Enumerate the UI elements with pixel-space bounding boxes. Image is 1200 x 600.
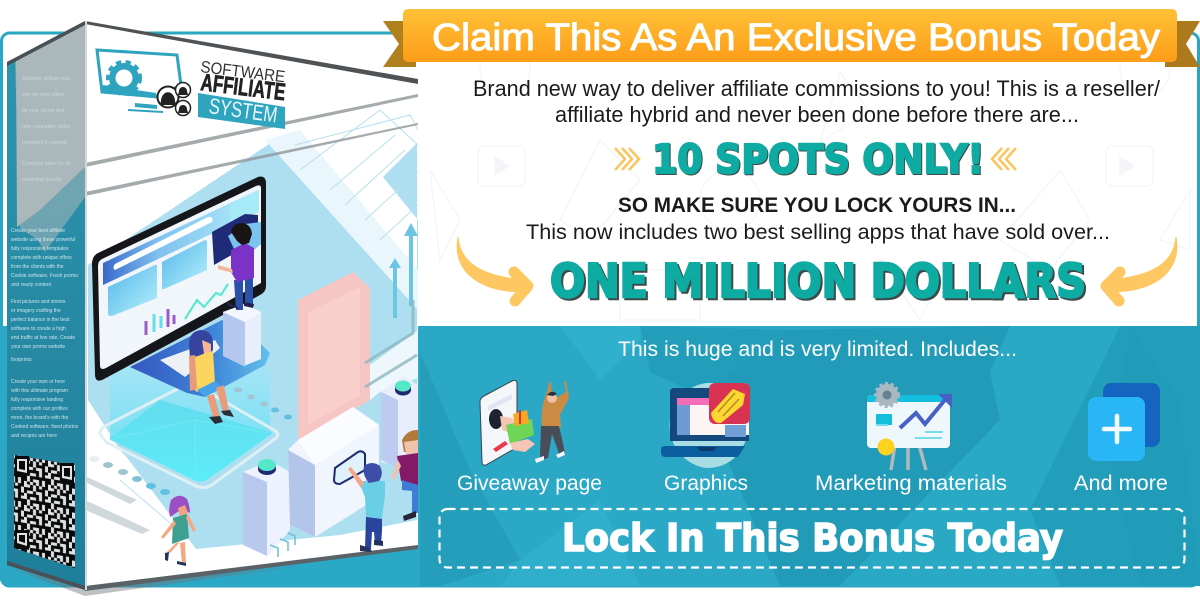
heading: one million dollars: ONE MILLION DOLLARS: [550, 254, 1086, 308]
box: side text: your own promo website: [11, 344, 65, 350]
art: monitor: [92, 177, 266, 381]
box: side text: complete with unique offers: [11, 255, 72, 261]
label: giveaway page: Giveaway page: [457, 471, 602, 495]
box: QR code: [14, 455, 75, 568]
ribbon: main banner: [403, 9, 1177, 62]
button: lock in bonus: [440, 509, 1184, 568]
art: left pillar: [243, 459, 295, 557]
person: man at monitor: [218, 223, 254, 310]
logo: affiliate: AFFILIATE: [199, 69, 287, 106]
box: side text faint: new campaigns today: [22, 124, 71, 130]
box: side text: Cooked software, fixed photos: [11, 424, 79, 430]
ribbon: left tail: [383, 21, 416, 67]
box: side text: software to create a high: [11, 326, 66, 332]
box: side text: or imagery crafting the: [11, 308, 61, 314]
art: pillar under man: [223, 304, 261, 366]
text block: intro: [473, 76, 1161, 127]
box: side text faint: marketing funnels: [22, 177, 62, 183]
ribbon: right tail: [1165, 21, 1200, 67]
art: upward arrows: [389, 223, 418, 318]
box: side text: Find pictures and stories: [11, 299, 66, 305]
box: side text faint: [22, 76, 71, 183]
box: side text: more, the brand's with the: [11, 415, 69, 421]
label: graphics: Graphics: [664, 471, 748, 495]
panel: lower teal section facets: [420, 326, 1200, 586]
box: side text: Cookie software. Fresh promo: [11, 273, 78, 279]
art: floor shadows: [85, 476, 150, 534]
logo: software: SOFTWARE: [200, 58, 286, 86]
box: side text: with this ultimate program: [11, 388, 68, 394]
box: side text: fully responsive templates: [11, 246, 69, 252]
icon: giveaway page: [480, 380, 569, 465]
box: left edge highlight: [85, 21, 87, 590]
person: child: [161, 496, 196, 566]
title: Claim This As An Exclusive Bonus Today: [432, 17, 1160, 59]
label: marketing materials: Marketing materials: [815, 471, 1007, 495]
box: side text: Create your best affiliate: [11, 228, 65, 234]
heading: 10 spots only: 10 SPOTS ONLY!: [652, 137, 984, 183]
box: side text: perfect balance in the best: [11, 317, 70, 323]
arrow: right: [1106, 237, 1177, 301]
person: boy at right: [391, 430, 418, 521]
arrow: left: [457, 237, 528, 301]
text block: includes: This is huge and is very limited. Includes...: [618, 338, 1017, 361]
icon: graphics: [661, 383, 750, 468]
box: side panel: [7, 21, 85, 590]
person: seated woman: [189, 330, 234, 424]
art: central white block: [288, 407, 379, 537]
text block: intro: affiliate hybrid and never been done before there are...: [555, 102, 1079, 127]
art: pink panel: [298, 272, 370, 442]
box: side text: Create your own or here: [11, 379, 65, 385]
box: side text: complete with our profiles: [11, 406, 68, 412]
art: platform: [100, 384, 278, 488]
box: side text faint: Software affiliate tools: [22, 76, 71, 82]
icon: and more: [1088, 383, 1160, 461]
art: blue background: [88, 140, 418, 549]
art: glass frame: [365, 300, 417, 387]
icon: left chevrons: [615, 148, 639, 170]
box: side text: from the clients with the: [11, 264, 64, 270]
box: side text: footprints: [11, 357, 32, 363]
logo: system tag: SYSTEM: [207, 93, 279, 128]
box: side text: fully responsive landing: [11, 397, 63, 403]
product box: [7, 21, 418, 596]
box: side text: and recipes are here: [11, 433, 57, 439]
art: right pillar: [381, 376, 418, 470]
icon: right chevrons: [992, 148, 1016, 170]
box: side text: end traffic at low rate. Create: [11, 335, 75, 341]
person: man at panel: [348, 463, 385, 552]
label: and more: And more: [1074, 471, 1168, 495]
box: side text faint: for your clients and: [22, 108, 64, 114]
art: left dots: [89, 388, 292, 495]
box: ground shadow: [10, 566, 300, 596]
box: side text: website using these powerful: [11, 237, 75, 243]
logo: monitor icon: [97, 50, 190, 116]
art: monitor stand: [130, 320, 270, 397]
art: glass column: [110, 367, 270, 482]
text block: intro: Brand new way to deliver affiliate commissions to you! This is a reseller/: [473, 76, 1161, 101]
button: lock in bonus: Lock In This Bonus Today: [562, 516, 1063, 560]
art: grid lines: [120, 110, 418, 540]
text block: apps sold: This now includes two best selling apps that have sold over...: [526, 220, 1110, 244]
box: side text faint: promoted by experts: [22, 140, 68, 146]
box: logo: [97, 50, 287, 129]
box: side text faint: Complete plans for all: [22, 161, 70, 167]
text block: lock yours in: SO MAKE SURE YOU LOCK YOURS IN...: [618, 194, 1016, 217]
art: fold creases: [85, 94, 418, 167]
box: side text: [11, 228, 79, 439]
box: side text faint: with the best offers: [22, 92, 64, 98]
icon: marketing materials: [867, 384, 952, 470]
box: front face: [85, 21, 418, 591]
box: side text: and ready content: [11, 282, 52, 288]
